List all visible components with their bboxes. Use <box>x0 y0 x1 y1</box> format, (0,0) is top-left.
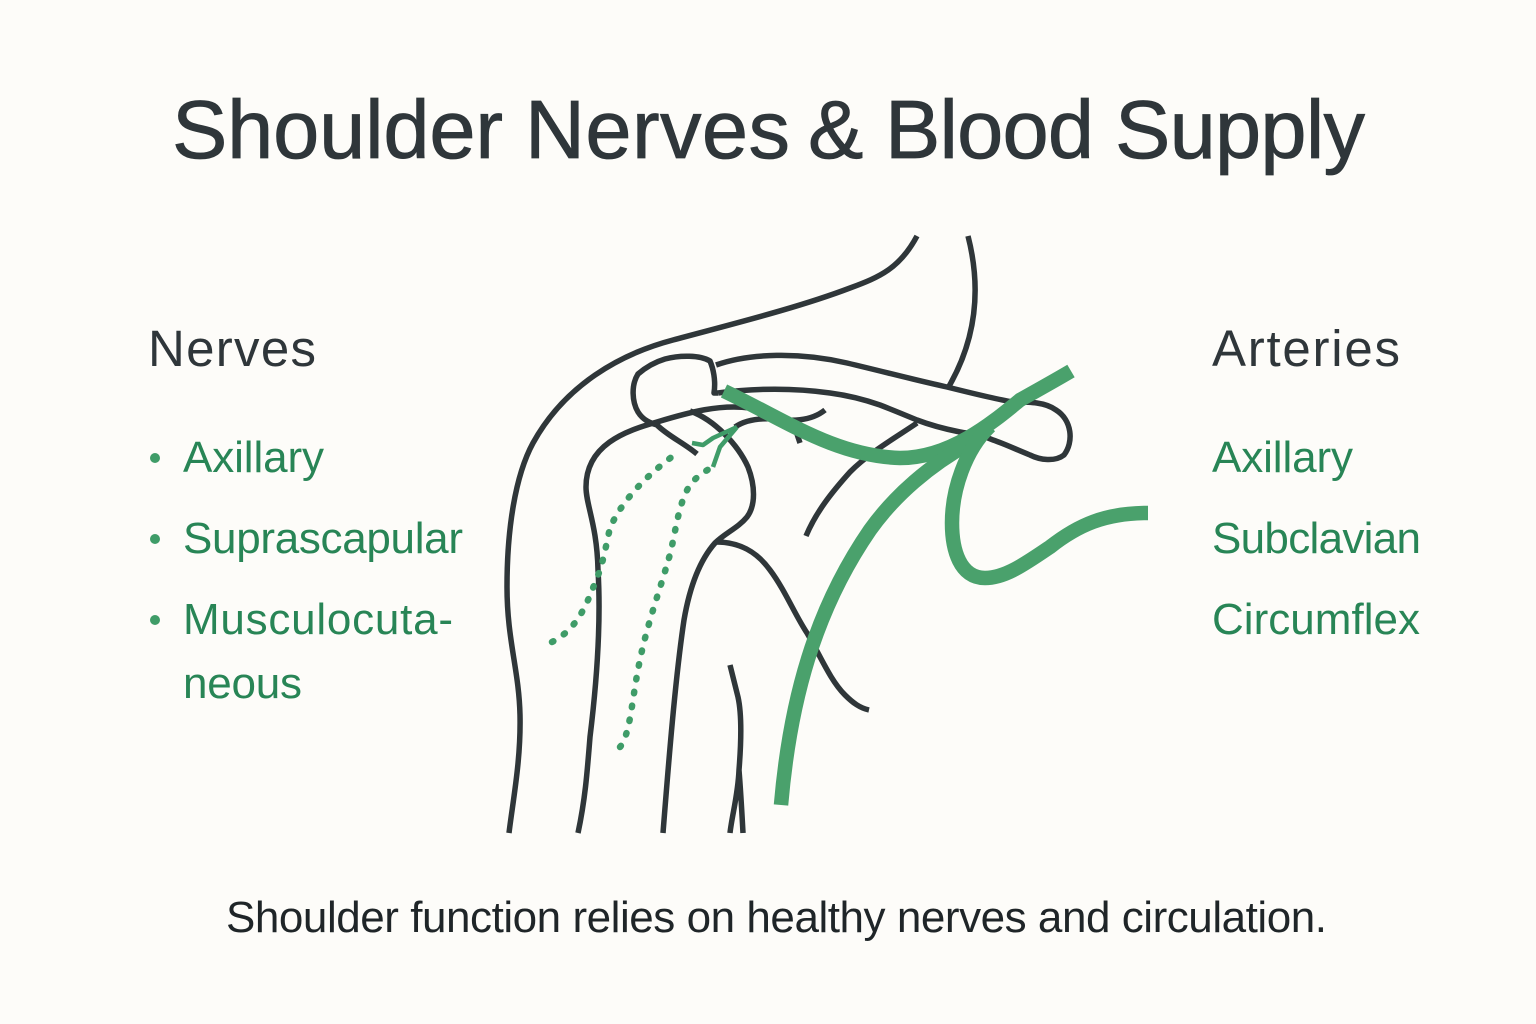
nerve item: suprascapular: Suprascapular <box>183 514 463 563</box>
title: Blood <box>885 83 1094 176</box>
footer caption: Shoulder function relies on healthy nerves and circulation. <box>226 893 1327 942</box>
title: Nerves <box>525 83 790 176</box>
artery item: circumflex: Circumflex <box>1212 595 1420 644</box>
nerve item: axillary: Axillary <box>183 433 324 482</box>
artery: descending branch <box>781 443 970 805</box>
nerve item: musculocutaneous: Musculocuta- <box>183 595 453 644</box>
nerve path: suprascapular dotted <box>552 453 677 642</box>
artery item: axillary: Axillary <box>1212 433 1353 482</box>
nerve item: musculocutaneous: neous <box>183 659 302 708</box>
title: Shoulder <box>172 83 503 176</box>
bone: acromion <box>633 356 718 454</box>
outline: shoulder and arm <box>507 236 917 833</box>
title: & <box>808 83 863 176</box>
bone: humerus outer edge <box>663 411 754 833</box>
shoulder anatomy diagram <box>507 236 1148 833</box>
nerve branch: thin connectors <box>692 427 737 467</box>
title <box>172 83 1366 176</box>
panel: arteries list <box>1212 320 1421 644</box>
nerve item: musculocutaneous <box>150 595 453 708</box>
outline: neck <box>948 236 975 388</box>
artery item: subclavian: Subclavian <box>1212 514 1421 563</box>
muscle line: inner arm <box>730 665 743 833</box>
title: Supply <box>1115 83 1366 176</box>
artery: axillary main <box>724 371 1071 458</box>
heading: nerves: Nerves <box>148 320 316 377</box>
bone: clavicle <box>716 355 1070 460</box>
nerve path: musculocutaneous dotted <box>620 467 713 747</box>
muscle line: small branch <box>735 410 825 443</box>
muscle line: lower curve <box>716 542 869 710</box>
muscle line: center curve <box>806 423 917 536</box>
panel: nerves list <box>148 320 463 708</box>
artery: circumflex loop <box>952 426 1148 578</box>
bone: humeral head <box>578 407 750 833</box>
heading: arteries: Arteries <box>1212 320 1400 377</box>
